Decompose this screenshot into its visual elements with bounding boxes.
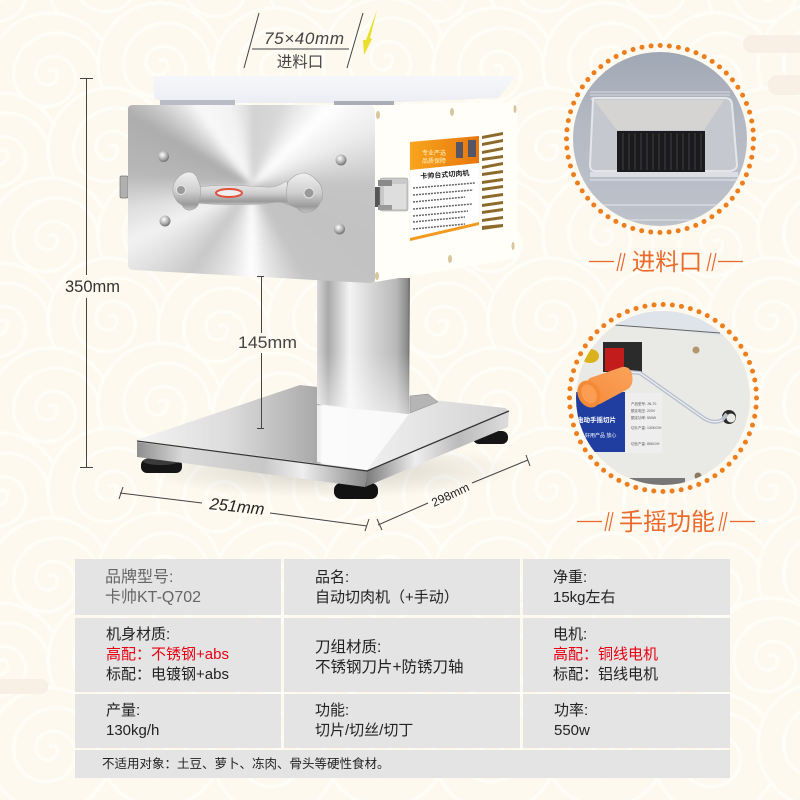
cell: power: 550w [554, 722, 590, 739]
cell: body material: 标配：电镀钢+abs [106, 666, 229, 683]
caption: hand crank: 手摇功能 [619, 509, 715, 536]
spec table [75, 559, 730, 778]
dimension: depth 298mm [377, 455, 530, 530]
dimension: height 350mm: 350mm [65, 278, 120, 296]
cell: net weight: 净重: [553, 569, 587, 586]
cell: body material: 机身材质: [106, 626, 170, 643]
caption: feed opening: 进料口 [632, 249, 702, 275]
product label sticker: 专业严选 [422, 149, 446, 157]
cell: motor: 标配：铝线电机 [553, 666, 658, 683]
dimension: width 251mm: 251mm [208, 495, 265, 519]
machine [120, 76, 520, 499]
photo: hand crank: 额定电压: 220V [631, 408, 656, 413]
base shadow and feet [140, 431, 520, 499]
circle detail: feed opening [566, 46, 754, 232]
cell: power: 功率: [554, 702, 588, 719]
dimension: depth 298mm: 298mm [429, 480, 472, 510]
cell: function: 切片/切丝/切丁 [315, 722, 413, 739]
cell: blade material [284, 618, 520, 692]
cell: body material: 高配：不锈钢+abs [106, 646, 229, 663]
photo: hand crank: 电动手摇切片 [577, 415, 616, 424]
cell: net weight [523, 559, 730, 615]
photo: hand crank [576, 311, 750, 485]
product label sticker [410, 136, 479, 241]
screws [158, 151, 346, 234]
machine body right face [372, 102, 518, 282]
cell: product name: 自动切肉机（+手动） [315, 589, 459, 606]
cell: motor: 电机: [553, 626, 587, 643]
base plate [136, 385, 509, 487]
cell: product name: 品名: [315, 569, 349, 586]
dimension: height 350mm [65, 78, 120, 468]
photo: hand crank: 切丝产量: 85KG/H [631, 441, 660, 446]
cell: function [284, 694, 520, 748]
cell: product name [284, 559, 520, 615]
photo: hand crank: 产品型号: JN-70 [631, 401, 656, 406]
caption: hand crank [577, 509, 755, 536]
dimension: feed opening 75x40mm [244, 13, 363, 71]
cell: body material [75, 618, 281, 692]
cell: blade material: 不锈钢刀片+防锈刀轴 [315, 659, 464, 676]
photo: hand crank: 好用产品 放心 [585, 432, 616, 439]
dimension: width 251mm [119, 487, 369, 531]
cell: function: 功能: [315, 702, 349, 719]
cell: motor [523, 618, 730, 692]
cell: net weight: 15kg左右 [553, 589, 616, 606]
photo: feed opening [570, 50, 750, 230]
bracket [410, 394, 438, 413]
cell: note: 不适用对象：土豆、萝卜、冻肉、骨头等硬性食材。 [102, 757, 390, 771]
photo: hand crank: 切片产量: 130KG/H [631, 425, 662, 430]
cell: model [75, 559, 281, 615]
cell: note [75, 750, 730, 778]
vents [482, 132, 503, 230]
caption: feed opening [589, 249, 743, 275]
icon: yellow arrow [363, 10, 377, 55]
product label sticker: 品质保障 [422, 157, 446, 165]
dimension: feed opening 75x40mm: 75×40mm [264, 29, 344, 48]
cell: output: 130kg/h [106, 722, 159, 739]
dimension: column height 145mm [238, 276, 297, 428]
cell: blade material: 刀组材质: [315, 639, 381, 656]
cell: output [75, 694, 281, 748]
cell: motor: 高配：铜线电机 [553, 646, 658, 663]
column reflection [317, 405, 409, 470]
cell: power [523, 694, 730, 748]
handle [173, 172, 323, 212]
dimension: column height 145mm: 145mm [238, 334, 297, 352]
tray [153, 76, 515, 105]
cell: model: 品牌型号: [105, 569, 173, 586]
right latch [374, 178, 408, 211]
cell: model: 卡帅KT-Q702 [105, 589, 201, 606]
product label sticker: 卡帅台式切肉机 [420, 168, 470, 181]
dimension: feed opening 75x40mm: 进料口 [277, 53, 323, 71]
cell: output: 产量: [106, 702, 140, 719]
left latch [120, 176, 128, 198]
photo: hand crank: 额定功率: 550W [631, 415, 657, 420]
column [317, 278, 410, 414]
circle detail: hand crank [560, 304, 760, 495]
stainless steel front plate [128, 105, 375, 283]
